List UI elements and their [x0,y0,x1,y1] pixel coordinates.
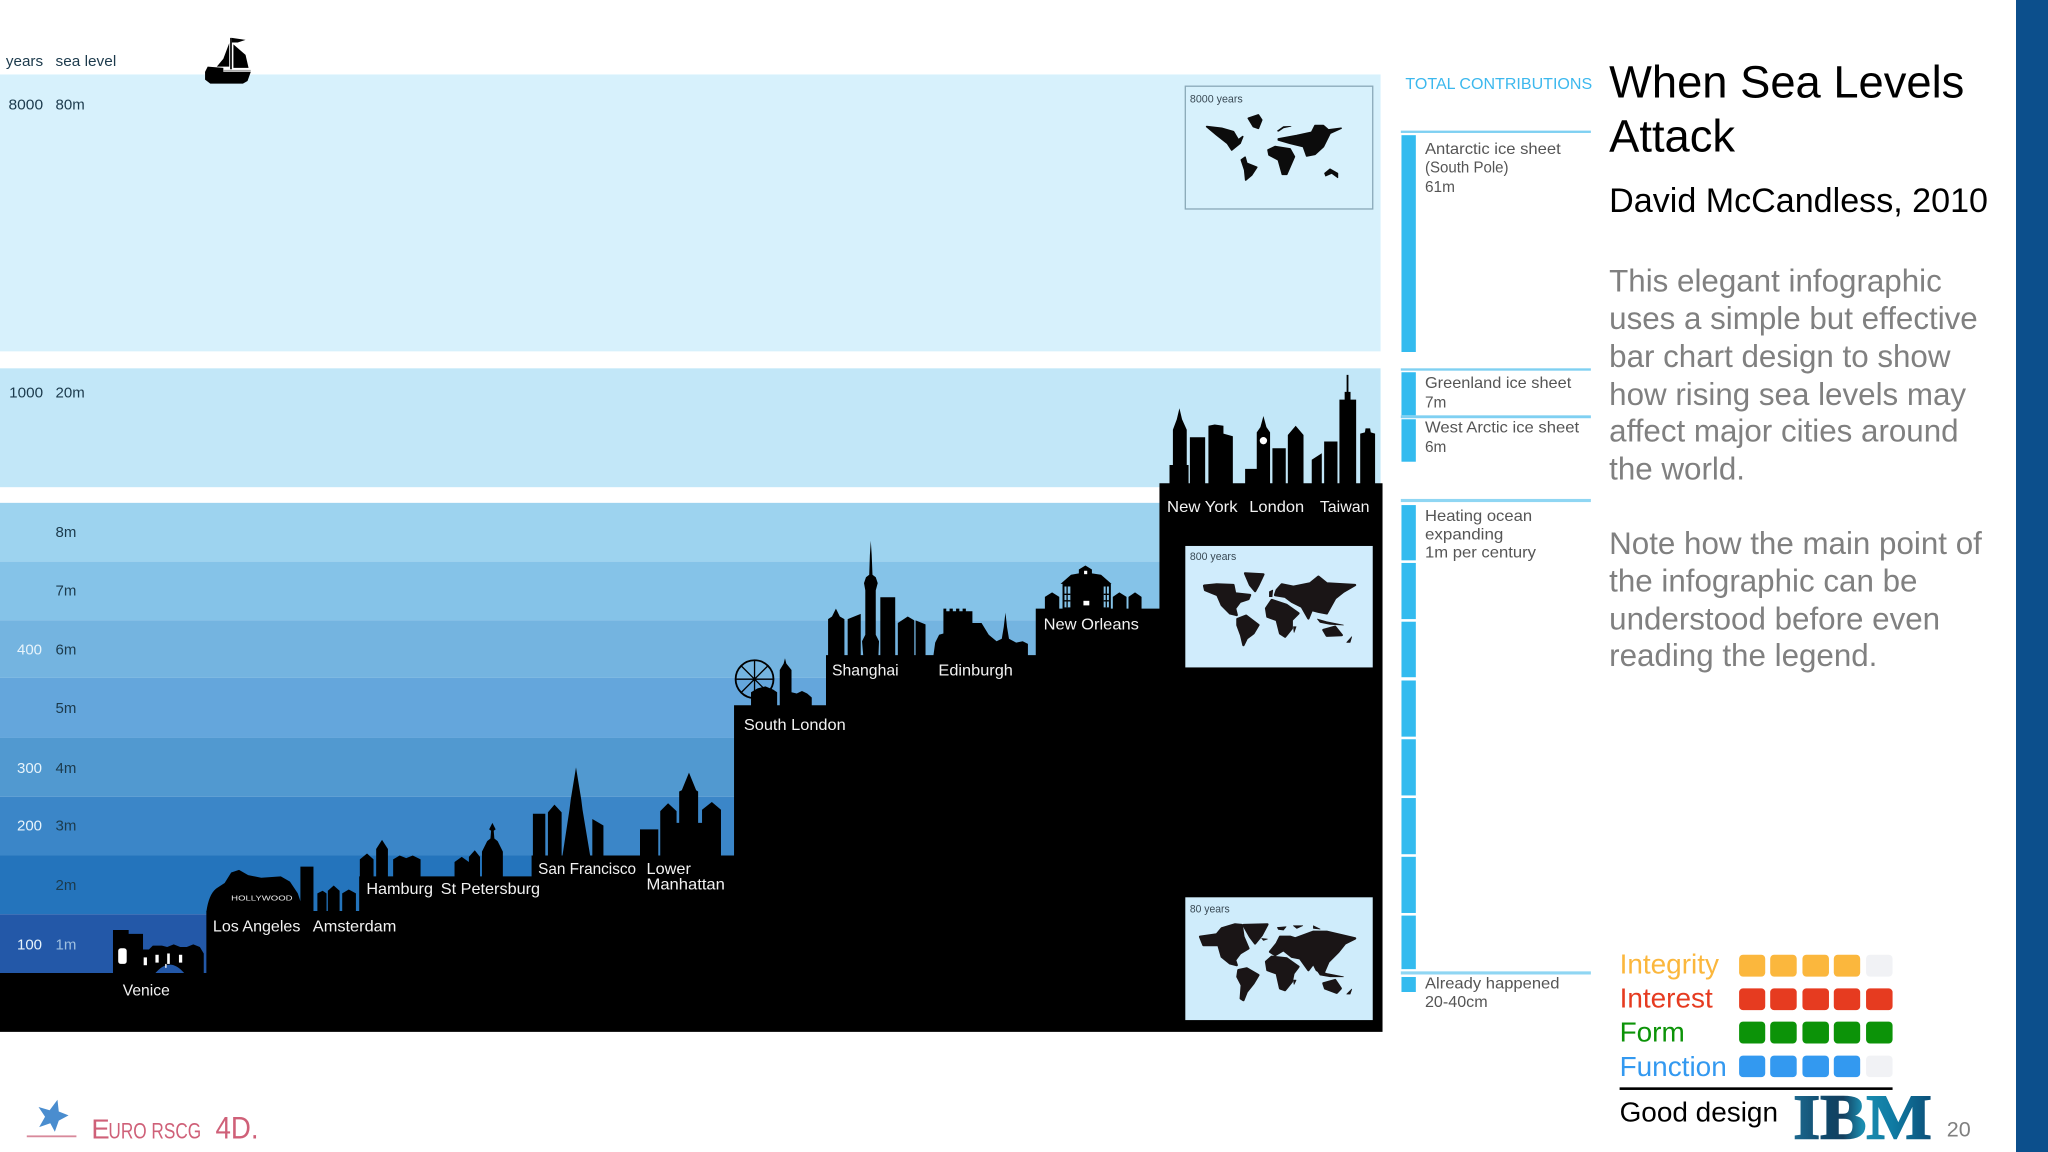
axis labels: years and sea level [6,53,116,954]
label: good design: Good design [1620,1096,1778,1127]
skyline: Venice [113,930,204,974]
axis labels: years and sea level: 8000 [8,97,43,114]
skyline: New Orleans [1045,566,1142,610]
text block: note: understood before even [1609,602,1940,637]
logo: Euro RSCG 4D: E [91,1114,110,1145]
logo: IBM: IBM [1793,1081,1932,1152]
text block: description: how rising sea levels may [1609,377,1966,412]
contribution: West Arctic ice sheet: 6m [1425,439,1446,456]
rating: function: Function [1620,1051,1727,1082]
axis labels: years and sea level: 80m [56,97,85,114]
contribution: Heating ocean expanding [1401,499,1591,969]
city labels: Venice [123,982,170,999]
contribution: already happened: 20-40cm [1425,994,1488,1011]
city labels [123,499,1369,999]
skyline: San Francisco [533,767,603,857]
contribution: already happened [1401,971,1591,1011]
side bar [2016,0,2048,1152]
text block: description: the world. [1609,451,1745,486]
skyline: Edinburgh [933,609,1028,657]
map: 8000 years [1185,86,1373,209]
skyline: Amsterdam [317,886,356,912]
map: 8000 years: 8000 years [1190,94,1243,106]
panel: total contributions [1401,76,1592,1011]
axis labels: years and sea level: 4m [56,760,76,777]
map: 800 years: 800 years [1190,551,1237,563]
city labels: South London [744,717,846,734]
contribution: Heating ocean expanding: Heating ocean [1425,508,1532,525]
rating: interest [1620,983,1893,1014]
axis labels: years and sea level: 1m [56,937,76,954]
heading: total contributions: TOTAL CONTRIBUTIONS [1405,76,1592,93]
staircase ground [0,483,1383,1032]
axis labels: years and sea level: years [6,53,43,70]
logo: Euro RSCG 4D [27,1100,259,1146]
contribution: Heating ocean expanding: 1m per century [1425,545,1536,562]
rating: interest: Interest [1620,983,1713,1014]
axis labels: years and sea level: 1000 [9,385,43,402]
axis labels: years and sea level: 5m [56,700,76,717]
contribution: West Arctic ice sheet: West Arctic ice sheet [1425,419,1580,436]
axis labels: years and sea level: 100 [17,937,42,954]
rating: integrity [1620,949,1893,980]
skyline: London [1245,416,1304,485]
axis labels: years and sea level: 200 [17,818,42,835]
title: When Sea Levels [1609,56,1964,107]
skyline: New York [1170,408,1233,485]
city labels: Lower [647,861,691,878]
city labels: San Francisco [538,861,636,878]
contribution: Greenland ice sheet: 7m [1425,395,1446,412]
city labels: New Orleans [1044,617,1139,634]
contribution: Greenland ice sheet: Greenland ice sheet [1425,375,1572,392]
axis labels: years and sea level: 20m [56,385,85,402]
text block: description: uses a simple but effective [1609,301,1978,336]
title second line: Attack [1609,111,1735,162]
rating: form: Form [1620,1017,1685,1048]
author: David McCandless, 2010 [1609,182,1988,220]
page number: 20 [1947,1116,1971,1141]
axis labels: years and sea level: 8m [56,524,76,541]
text block: description [1609,263,1978,486]
axis labels: years and sea level: 300 [17,760,42,777]
contribution: Antarctic ice sheet: 61m [1425,179,1455,196]
contribution: already happened: Already happened [1425,976,1560,993]
city labels: Taiwan [1320,499,1369,516]
city labels: London [1249,499,1304,516]
rating: form [1620,1017,1893,1048]
text block: note [1609,526,1982,673]
city labels: Hamburg [366,881,433,898]
map: 80 years: 80 years [1190,903,1230,915]
map: 800 years [1185,546,1373,667]
legend: design ratings [1620,949,1893,1127]
skyline: St Petersburg [455,823,503,878]
contribution: Antarctic ice sheet: Antarctic ice sheet [1425,141,1562,158]
axis labels: years and sea level: sea level [56,53,116,70]
logo: Euro RSCG 4D: URO RSCG [108,1119,201,1144]
logo: Euro RSCG 4D: 4D. [216,1111,259,1146]
rating: integrity: Integrity [1620,949,1719,980]
icon: sailing boat [205,38,251,84]
text block: note: Note how the main point of [1609,526,1982,561]
chart: sea level bands [0,74,1381,974]
text block: description: affect major cities around [1609,413,1959,448]
contribution: West Arctic ice sheet [1401,415,1591,462]
axis labels: years and sea level: 400 [17,641,42,658]
city labels: New York [1167,499,1238,516]
city labels: Shanghai [832,662,899,679]
skyline: South London [736,658,812,707]
city labels: Amsterdam [313,918,396,935]
axis labels: years and sea level: 6m [56,641,76,658]
skyline: Los Angeles: HOLLYWOOD [231,894,293,903]
text block: note: reading the legend. [1609,638,1877,673]
city labels: St Petersburg [441,881,540,898]
contribution: Heating ocean expanding: expanding [1425,526,1503,543]
skyline: Lower Manhattan [640,773,721,857]
text block: note: the infographic can be [1609,564,1917,599]
text block: description: bar chart design to show [1609,339,1951,374]
skyline: Hamburg [360,840,421,878]
city labels: Los Angeles [213,918,301,935]
axis labels: years and sea level: 7m [56,583,76,600]
contribution: Greenland ice sheet [1401,368,1591,415]
contribution: Antarctic ice sheet: (South Pole) [1425,159,1509,176]
black staircase ground with city skylines [0,375,1383,1032]
axis labels: years and sea level: 2m [56,877,76,894]
axis labels: years and sea level: 3m [56,818,76,835]
city labels: Edinburgh [938,662,1013,679]
rating: function [1620,1051,1893,1082]
map: 80 years [1185,897,1373,1020]
contribution: Antarctic ice sheet [1401,131,1591,352]
city labels: Manhattan [647,876,725,893]
skyline: Shanghai [828,541,926,657]
skyline: Los Angeles [206,867,313,912]
skyline: Taiwan [1312,375,1375,485]
text block: description: This elegant infographic [1609,263,1942,298]
